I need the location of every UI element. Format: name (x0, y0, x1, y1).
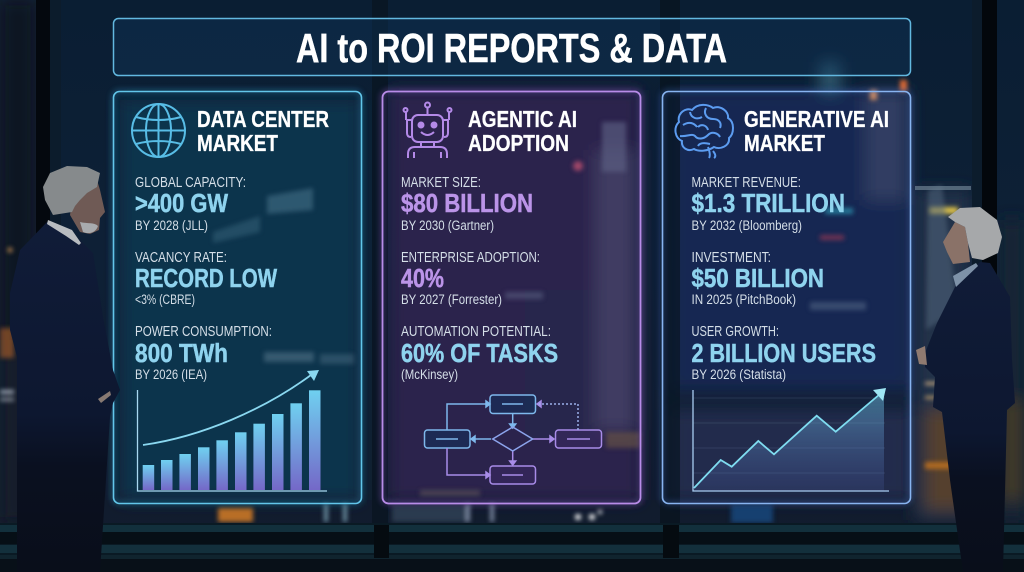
panel: generative AI market (662, 91, 910, 504)
stat: market revenue: $1.3 TRILLION (692, 190, 845, 218)
stat: global capacity (135, 174, 246, 233)
stat: user growth: 2 BILLION USERS (692, 340, 876, 368)
icon: globe (132, 104, 185, 157)
heading (468, 106, 577, 156)
stat: power consumption (135, 323, 272, 382)
stat: user growth: USER GROWTH: (692, 323, 779, 340)
stat: market revenue (692, 174, 845, 233)
figure: man in suit (10, 166, 120, 572)
title banner (114, 18, 910, 76)
stat: user growth: BY 2026 (Statista) (692, 367, 786, 382)
stat: global capacity: BY 2028 (JLL) (135, 218, 208, 233)
stat: power consumption: POWER CONSUMPTION: (135, 323, 272, 340)
stat: enterprise adoption: 40% (401, 265, 444, 293)
panel: agentic AI adoption (382, 91, 641, 504)
stat: vacancy rate: <3% (CBRE) (135, 292, 195, 307)
stat: power consumption: BY 2026 (IEA) (135, 367, 207, 382)
stat: enterprise adoption (401, 249, 540, 307)
heading (197, 106, 329, 156)
heading: AGENTIC AI (468, 106, 577, 132)
stat: enterprise adoption: ENTERPRISE ADOPTION: (401, 249, 540, 266)
stat: automation potential (401, 323, 558, 382)
stat: investment: INVESTMENT: (692, 249, 771, 266)
stat: vacancy rate: RECORD LOW (135, 265, 278, 293)
stat: investment (692, 249, 824, 307)
heading: MARKET (197, 130, 278, 156)
stat: market revenue: BY 2032 (Bloomberg) (692, 218, 802, 233)
stat: market size: $80 BILLION (401, 190, 533, 218)
icon: robot (404, 102, 452, 158)
icon: brain (675, 105, 733, 158)
panel: data center market (113, 91, 362, 504)
heading (744, 106, 889, 156)
stat: user growth (692, 323, 876, 382)
stat: market size: MARKET SIZE: (401, 174, 481, 191)
heading: GENERATIVE AI (744, 106, 889, 132)
stat: automation potential: AUTOMATION POTENTIAL: (401, 323, 551, 340)
heading: MARKET (744, 130, 825, 156)
line chart (693, 388, 889, 491)
title text: AI to ROI REPORTS & DATA (296, 25, 727, 71)
stat: global capacity: >400 GW (135, 190, 229, 218)
flowchart (424, 395, 602, 484)
stat: investment: IN 2025 (PitchBook) (692, 292, 796, 307)
stat: market revenue: MARKET REVENUE: (692, 174, 801, 191)
bar chart (138, 370, 327, 491)
stat: market size (401, 174, 533, 233)
figure: woman in suit (916, 207, 1015, 572)
stat: enterprise adoption: BY 2027 (Forrester) (401, 292, 502, 307)
stat: power consumption: 800 TWh (135, 340, 228, 368)
heading: DATA CENTER (197, 106, 329, 132)
stat: automation potential: 60% OF TASKS (401, 340, 558, 368)
arrow: trend line (694, 388, 886, 488)
heading: ADOPTION (468, 130, 569, 156)
stat: market size: BY 2030 (Gartner) (401, 218, 494, 233)
stat: global capacity: GLOBAL CAPACITY: (135, 174, 246, 191)
stat: vacancy rate: VACANCY RATE: (135, 249, 227, 266)
stat: automation potential: (McKinsey) (401, 367, 458, 382)
arrow: growth curve (143, 370, 319, 445)
stat: vacancy rate (135, 249, 278, 307)
stat: investment: $50 BILLION (692, 265, 824, 293)
